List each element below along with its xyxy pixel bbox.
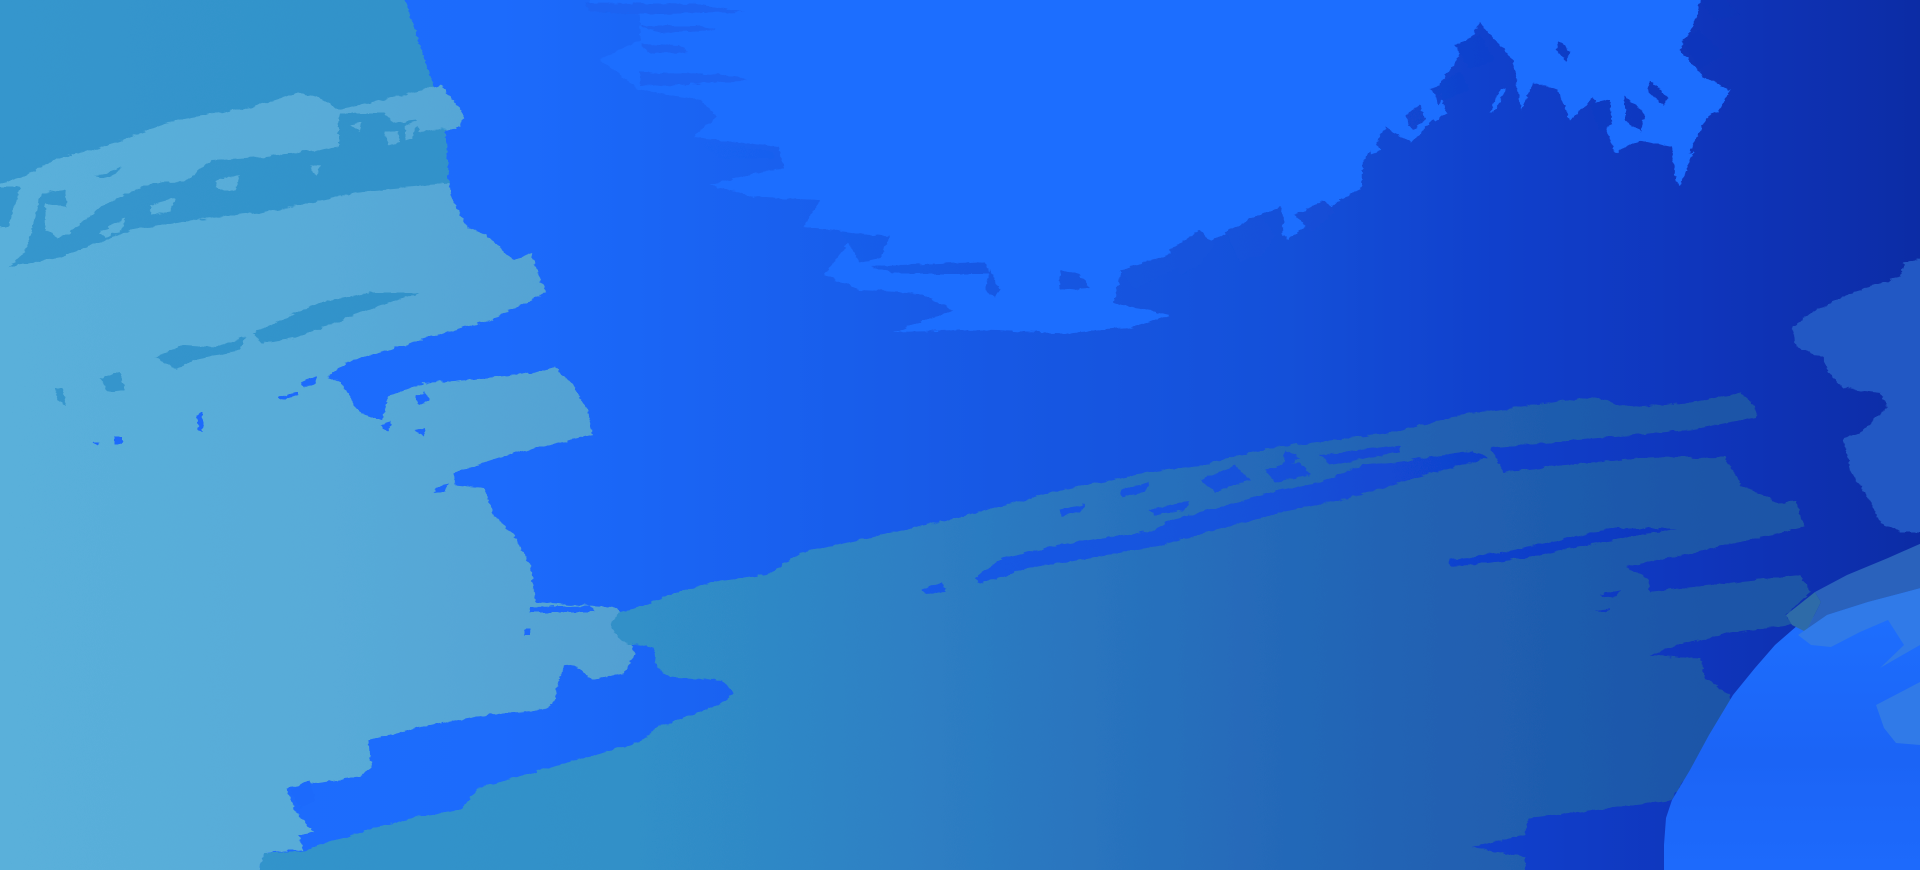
lighter band: [1798, 583, 1920, 668]
pale flecks in teal band: [100, 120, 420, 238]
right upper blue blob: [1792, 255, 1920, 532]
bright flecks beyond stroke edge: [1282, 88, 1730, 238]
overlap patch: [1786, 592, 1821, 632]
upper band: [1802, 535, 1920, 635]
dark wisps on stroke edge: [585, 3, 748, 86]
bottom teal brush stroke: [253, 393, 1811, 870]
bright flecks in pale layer: [94, 376, 595, 808]
top left teal brush layer: [0, 0, 443, 300]
bottom right bright circle: [1664, 535, 1920, 870]
teal band inside pale layer: [0, 113, 449, 405]
left pale blue brush layer: [0, 85, 635, 870]
gaps in bottom stroke: [922, 445, 1678, 614]
lighter spot: [1876, 680, 1920, 745]
top centre bright brush stroke: [585, 0, 1741, 333]
